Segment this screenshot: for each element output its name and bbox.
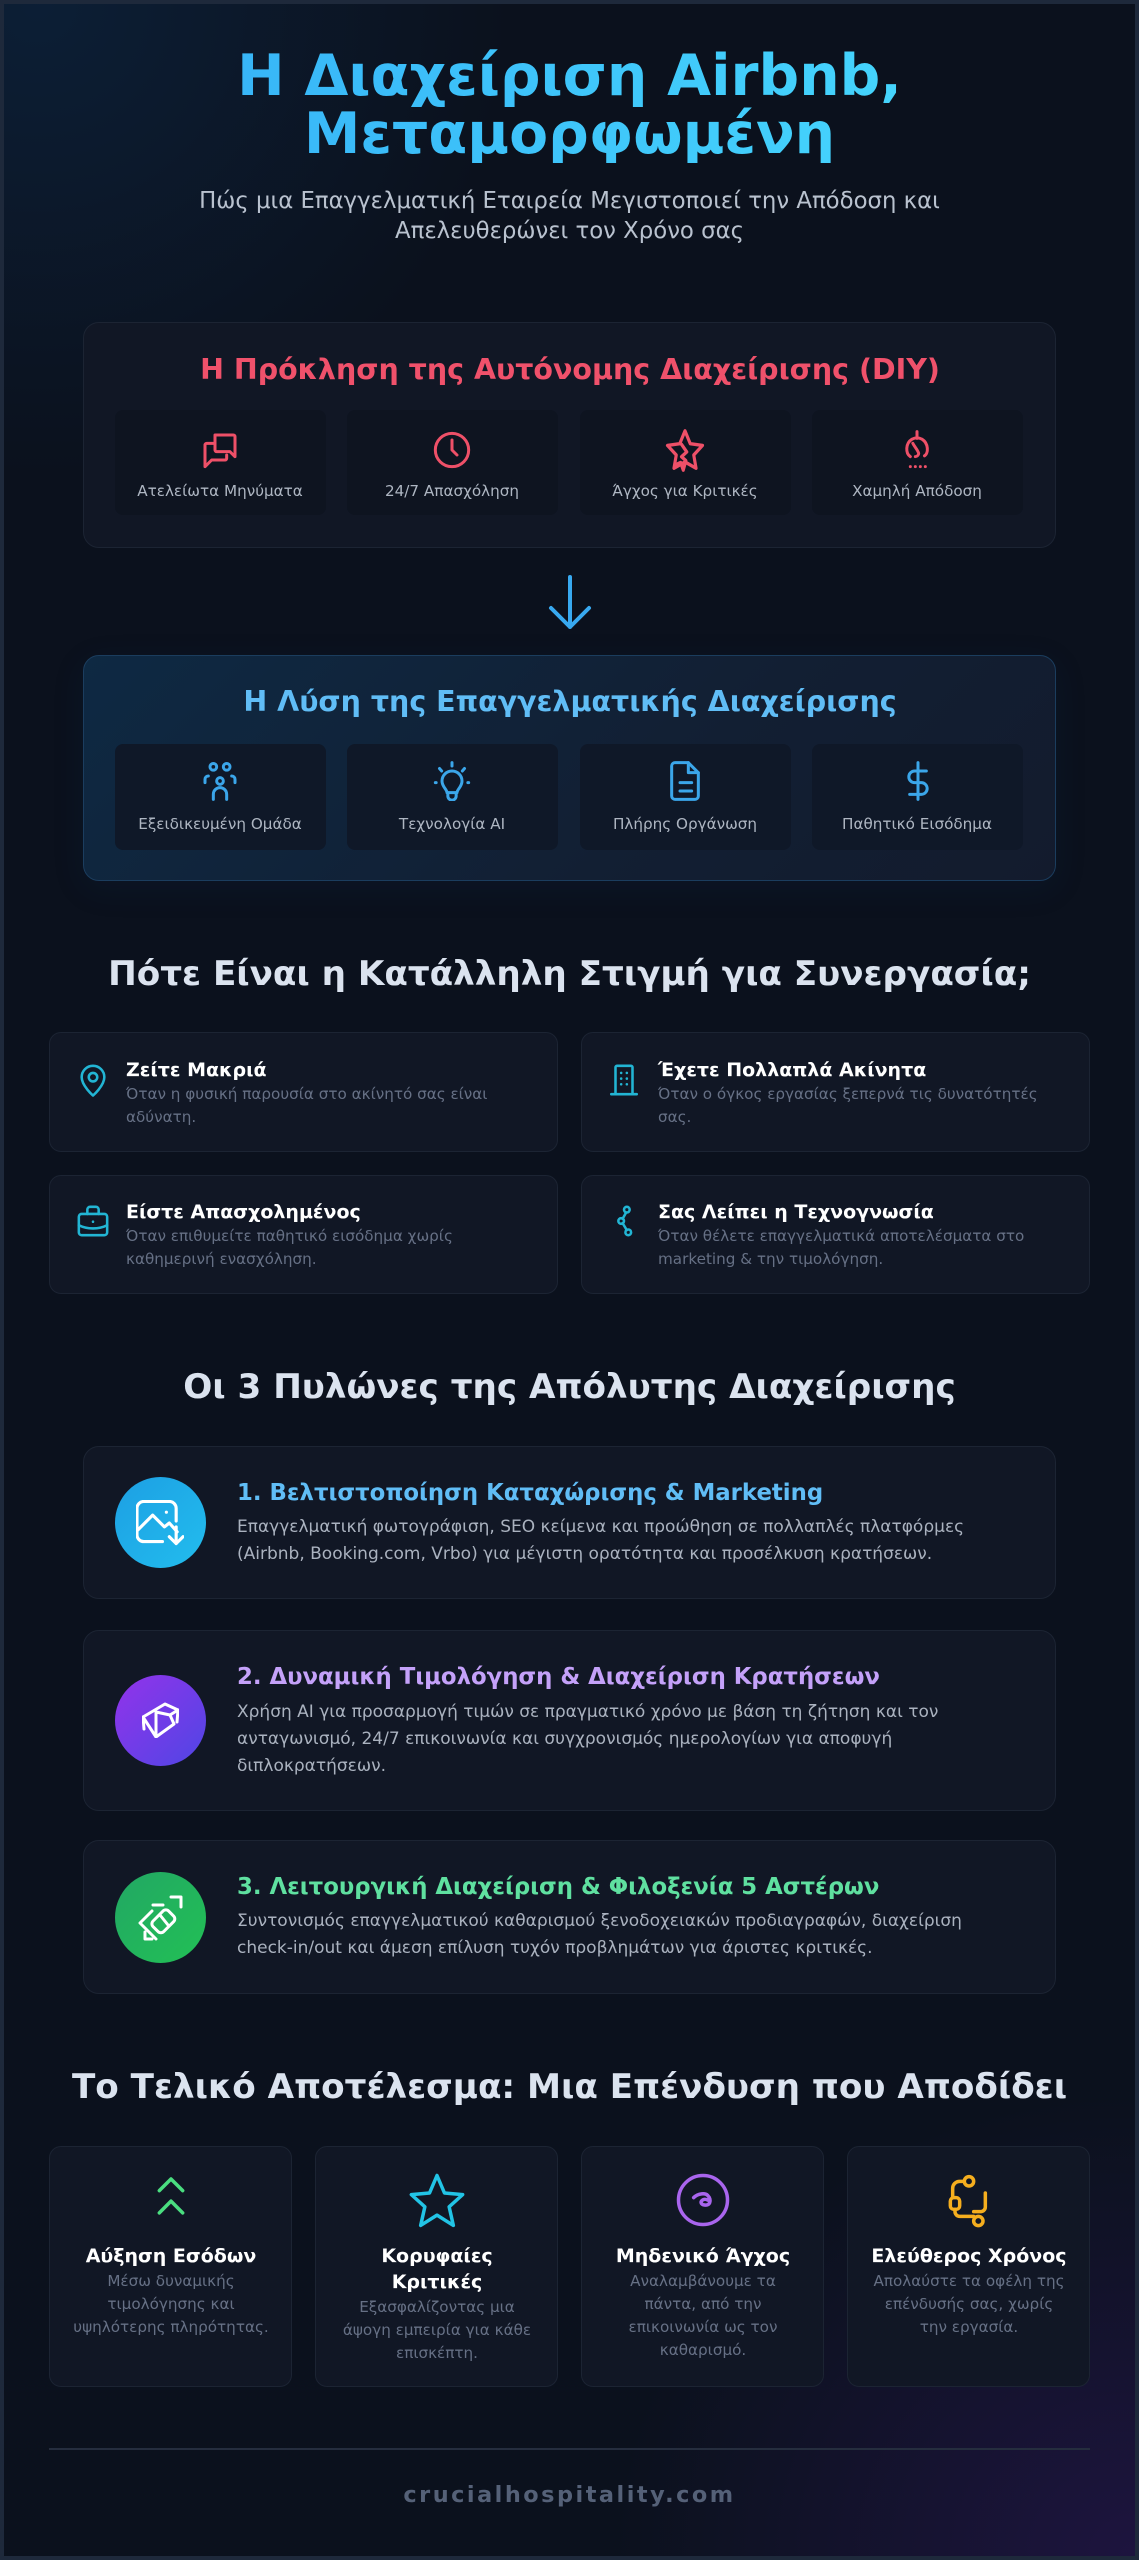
DIY item: low yield	[812, 410, 1023, 515]
result card: free time	[847, 2146, 1090, 2387]
title: Η Διαχείριση Airbnb,	[237, 43, 902, 109]
label: 24/7 Απασχόληση	[385, 482, 519, 500]
footer rule	[49, 2448, 1090, 2450]
title: Κορυφαίες	[381, 2245, 493, 2267]
body	[237, 1517, 964, 1564]
title: Μηδενικό Άγχος	[616, 2245, 790, 2267]
description	[629, 2272, 777, 2359]
description: πάντα, από την	[645, 2295, 761, 2313]
icon: building	[610, 1064, 638, 1096]
DIY item: review stress	[580, 410, 791, 515]
icon: cleaning	[115, 1872, 206, 1963]
icon: clock	[434, 432, 470, 468]
description	[873, 2272, 1065, 2336]
label: Ατελείωτα Μηνύματα	[137, 482, 303, 500]
body: ανταγωνισμό, 24/7 επικοινωνία και συγχρονισμός ημερολογίων για αποφυγή	[237, 1729, 892, 1749]
icon: team	[204, 762, 236, 801]
card: know-how	[581, 1175, 1090, 1294]
description: υψηλότερης πληρότητας.	[73, 2318, 269, 2336]
icon: dollar	[907, 761, 929, 801]
description: Όταν επιθυμείτε παθητικό εισόδημα χωρίς	[126, 1227, 453, 1245]
label: Τεχνολογία AI	[399, 815, 505, 833]
body: check-in/out και άμεση επίλυση τυχόν προβλημάτων για άριστες κριτικές.	[237, 1938, 873, 1958]
description	[658, 1227, 1024, 1268]
card: multiple properties	[581, 1032, 1090, 1152]
description: σας.	[658, 1108, 691, 1126]
icon: lightbulb	[434, 761, 470, 801]
label: Πλήρης Οργάνωση	[613, 815, 757, 833]
description: Αναλαμβάνουμε τα	[630, 2272, 776, 2290]
description: καθαρισμό.	[660, 2341, 746, 2359]
text: Σας Λείπει η Τεχνογνωσία	[658, 1201, 934, 1223]
body: Συντονισμός επαγγελματικού καθαρισμού ξενοδοχειακών προδιαγραφών, διαχείριση	[237, 1911, 962, 1931]
panel: DIY challenge	[83, 322, 1056, 548]
icon: listing photo	[115, 1477, 206, 1568]
title: Αύξηση Εσόδων	[86, 2245, 256, 2267]
solution item: organisation	[580, 744, 791, 850]
text: Είστε Απασχολημένος	[126, 1201, 361, 1223]
description: την εργασία.	[920, 2318, 1018, 2336]
icon: messages	[204, 434, 236, 468]
description: καθημερινή ενασχόληση.	[126, 1250, 317, 1268]
icon: calm circle	[676, 2174, 730, 2226]
body: (Airbnb, Booking.com, Vrbo) για μέγιστη ορατότητα και προσέλκυση κρατήσεων.	[237, 1544, 932, 1564]
description: επισκέπτη.	[396, 2344, 478, 2362]
subtitle: Πώς μια Επαγγελματική Εταιρεία Μεγιστοποιεί την Απόδοση και	[199, 188, 940, 214]
solution heading: Η Λύση της Επαγγελματικής Διαχείρισης	[243, 685, 897, 718]
title: 2. Δυναμική Τιμολόγηση & Διαχείριση Κρατήσεων	[237, 1664, 880, 1690]
footer website: crucialhospitality.com	[403, 2482, 736, 2508]
body	[237, 1702, 938, 1776]
solution item: passive income	[812, 744, 1023, 850]
title: Κριτικές	[392, 2270, 482, 2292]
description: αδύνατη.	[126, 1108, 196, 1126]
description	[73, 2272, 269, 2336]
title: Μεταμορφωμένη	[304, 101, 835, 167]
subtitle: Απελευθερώνει τον Χρόνο σας	[395, 218, 744, 244]
description: Απολαύστε τα οφέλη της	[873, 2272, 1065, 2290]
label: Άγχος για Κριτικές	[612, 482, 758, 500]
body: Επαγγελματική φωτογράφιση, SEO κείμενα και προώθηση σε πολλαπλές πλατφόρμες	[237, 1517, 964, 1537]
description: τιμολόγησης και	[107, 2295, 235, 2313]
pillar 1	[83, 1446, 1056, 1599]
DIY item: clock	[347, 410, 558, 515]
icon: briefcase	[78, 1206, 108, 1236]
subtitle	[199, 188, 940, 244]
description	[343, 2298, 531, 2362]
text: Ζείτε Μακριά	[126, 1059, 267, 1081]
title	[237, 48, 902, 163]
heading: three pillars: Οι 3 Πυλώνες της Απόλυτης Διαχείρισης	[183, 1367, 956, 1407]
result card: reviews	[315, 2146, 558, 2387]
pillar 3	[83, 1840, 1056, 1994]
body	[237, 1911, 962, 1958]
icon: map pin	[80, 1064, 106, 1097]
title: Ελεύθερος Χρόνος	[871, 2245, 1067, 2267]
description: επένδυσής σας, χωρίς	[885, 2295, 1053, 2313]
description: Όταν θέλετε επαγγελματικά αποτελέσματα στο	[658, 1227, 1024, 1245]
description: Όταν η φυσική παρουσία στο ακίνητό σας είναι	[126, 1085, 487, 1103]
icon: double chevron	[158, 2177, 184, 2215]
solution item: team	[115, 744, 326, 850]
icon: star	[410, 2174, 464, 2228]
card: busy	[49, 1175, 558, 1294]
arrow down	[548, 575, 592, 629]
description: επικοινωνία ως τον	[629, 2318, 777, 2336]
icon: cube	[115, 1675, 206, 1766]
heading: when to partner: Πότε Είναι η Κατάλληλη Στιγμή για Συνεργασία;	[108, 954, 1031, 994]
description	[126, 1085, 487, 1126]
DIY heading: Η Πρόκληση της Αυτόνομης Διαχείρισης (DIY)	[200, 353, 940, 386]
label: Παθητικό Εισόδημα	[842, 815, 992, 833]
DIY item: messages	[115, 410, 326, 515]
solution item: AI	[347, 744, 558, 850]
text: Έχετε Πολλαπλά Ακίνητα	[658, 1059, 926, 1081]
description	[126, 1227, 453, 1268]
body: Χρήση AI για προσαρμογή τιμών σε πραγματικό χρόνο με βάση τη ζήτηση και τον	[237, 1702, 938, 1722]
result card: zero stress	[581, 2146, 824, 2387]
icon: broken star	[666, 429, 704, 472]
description: Μέσω δυναμικής	[107, 2272, 235, 2290]
icon: route nodes	[948, 2174, 988, 2228]
icon: document	[670, 761, 700, 801]
icon: nodes	[617, 1206, 632, 1236]
icon: low yield gauge	[905, 430, 929, 468]
description	[658, 1085, 1038, 1126]
title: 1. Βελτιστοποίηση Καταχώρισης & Marketing	[237, 1480, 823, 1506]
title: 3. Λειτουργική Διαχείριση & Φιλοξενία 5 Αστέρων	[237, 1874, 879, 1900]
description: άψογη εμπειρία για κάθε	[343, 2321, 531, 2339]
label: Εξειδικευμένη Ομάδα	[138, 815, 302, 833]
pillar 2	[83, 1630, 1056, 1811]
result card: revenue	[49, 2146, 292, 2387]
card: live far	[49, 1032, 558, 1152]
description: marketing & την τιμολόγηση.	[658, 1250, 883, 1268]
description: Όταν ο όγκος εργασίας ξεπερνά τις δυνατότητές	[658, 1085, 1038, 1103]
heading: final result: Το Τελικό Αποτέλεσμα: Μια Επένδυση που Αποδίδει	[72, 2067, 1067, 2107]
label: Χαμηλή Απόδοση	[852, 482, 982, 500]
body: διπλοκρατήσεων.	[237, 1756, 386, 1776]
description: Εξασφαλίζοντας μια	[359, 2298, 515, 2316]
panel: solution	[83, 655, 1056, 881]
title	[381, 2245, 493, 2292]
